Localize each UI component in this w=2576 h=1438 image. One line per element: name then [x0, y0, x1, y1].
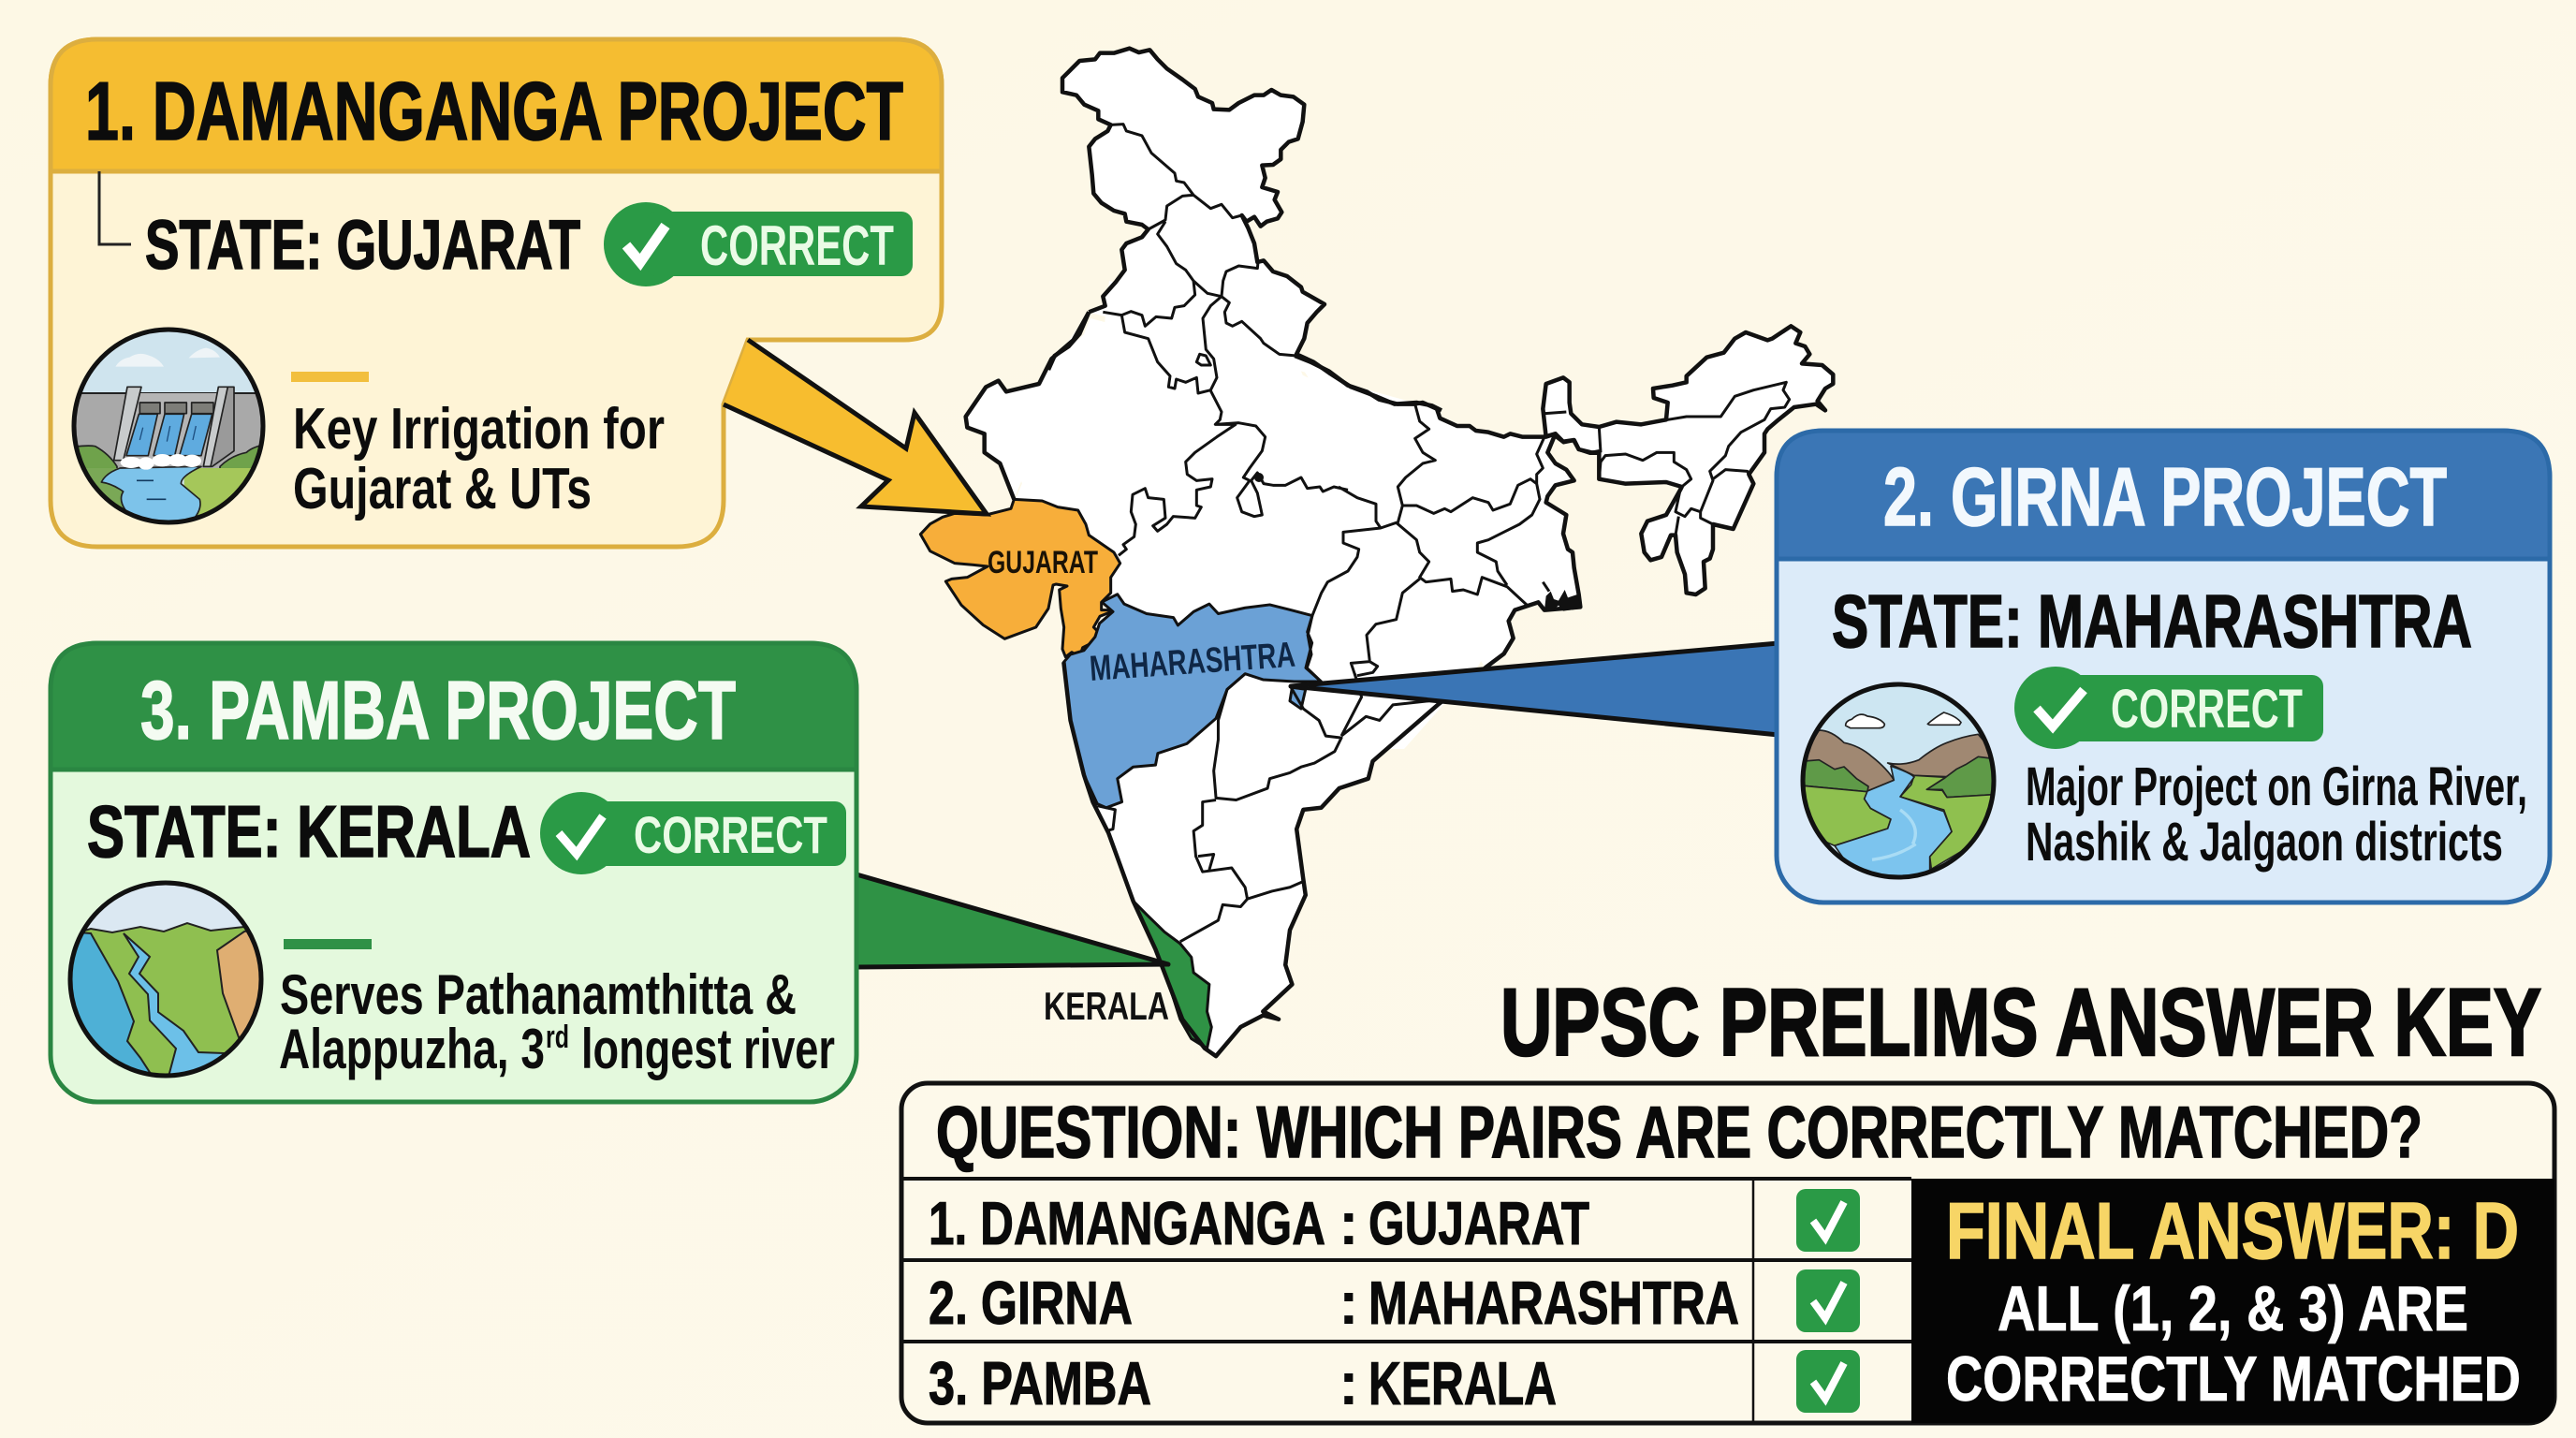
- southern state boundaries: [1097, 674, 1428, 942]
- eastern state boundaries: [1306, 404, 1549, 682]
- panel 1: Damanganga project: [51, 39, 987, 547]
- row 2: [929, 1269, 1860, 1337]
- map label: Maharashtra: MAHARASHTRA: [1089, 636, 1296, 689]
- correct badge: CORRECT: [634, 805, 827, 864]
- panel body: [51, 39, 942, 547]
- panel body: [51, 643, 856, 1102]
- row 3: [929, 1349, 1860, 1417]
- icon: river valley: [1797, 679, 2003, 885]
- panel header band: [51, 643, 856, 770]
- row 1: [929, 1189, 1860, 1257]
- description: rd: [546, 1020, 569, 1055]
- callout pointer: green to Kerala: [854, 874, 1168, 967]
- row 3: KERALA: [1368, 1349, 1557, 1417]
- central state boundaries: [1119, 390, 1348, 555]
- panel header band: [1777, 431, 2550, 559]
- callout pointer: blue to Maharashtra: [1291, 643, 1783, 735]
- table frame: [901, 1083, 2554, 1423]
- northern state boundaries: [1103, 125, 1296, 393]
- description: Gujarat & UTs: [293, 457, 592, 521]
- tree connector: [99, 171, 131, 244]
- arrow to Gujarat: [724, 340, 987, 514]
- correct badge: [604, 202, 913, 286]
- accent dash: [284, 939, 372, 949]
- correct badge: CORRECT: [2111, 679, 2303, 740]
- state: Kerala: [1134, 901, 1211, 1049]
- row 2: 2. GIRNA: [929, 1269, 1133, 1337]
- accent dash: [291, 372, 369, 382]
- description: Alappuzha, 3: [279, 1018, 545, 1080]
- map label: Kerala: KERALA: [1044, 984, 1169, 1028]
- state: Maharashtra: [1063, 594, 1322, 808]
- final answer block: ALL (1, 2, & 3) ARE: [1998, 1273, 2468, 1344]
- row 3: :: [1339, 1349, 1359, 1417]
- panel body: [1777, 431, 2550, 902]
- description: longest river: [581, 1018, 835, 1080]
- state line: STATE: GUJARAT: [145, 206, 580, 284]
- icon: dam: [66, 323, 271, 529]
- row 1: 1. DAMANGANGA: [929, 1189, 1325, 1257]
- icon: Kerala terrain: [66, 880, 271, 1086]
- state: Gujarat: [920, 499, 1120, 657]
- map of India: [920, 49, 1833, 1056]
- correct badge: [2014, 667, 2323, 749]
- land fill: [966, 49, 1833, 1056]
- country outline: [966, 49, 1833, 1056]
- description: [293, 397, 665, 521]
- panel header band: [51, 39, 942, 171]
- description: Serves Pathanamthitta &: [280, 963, 797, 1026]
- answer table: [901, 1083, 2554, 1423]
- sundarbans and chicken's neck detail: [1254, 433, 1600, 611]
- row 3: 3. PAMBA: [929, 1349, 1151, 1417]
- description: [2026, 756, 2527, 873]
- description: [279, 963, 835, 1080]
- final answer block: [1911, 1179, 2554, 1423]
- map label: Gujarat: GUJARAT: [988, 545, 1098, 580]
- row 2: :: [1339, 1269, 1359, 1337]
- state line: STATE: KERALA: [87, 790, 531, 873]
- row 1: GUJARAT: [1368, 1189, 1589, 1257]
- correct badge: CORRECT: [700, 214, 894, 277]
- panel title: 1. DAMANGANGA PROJECT: [85, 65, 903, 157]
- description: Key Irrigation for: [293, 397, 665, 462]
- north-east state boundaries: [1544, 382, 1790, 536]
- panel 3: Pamba project: [51, 643, 856, 1102]
- row 1: :: [1339, 1189, 1359, 1257]
- correct badge: [540, 792, 846, 874]
- panel title: 3. PAMBA PROJECT: [140, 664, 736, 756]
- panel 2: Girna project: [1777, 431, 2550, 902]
- row 2: MAHARASHTRA: [1368, 1269, 1739, 1337]
